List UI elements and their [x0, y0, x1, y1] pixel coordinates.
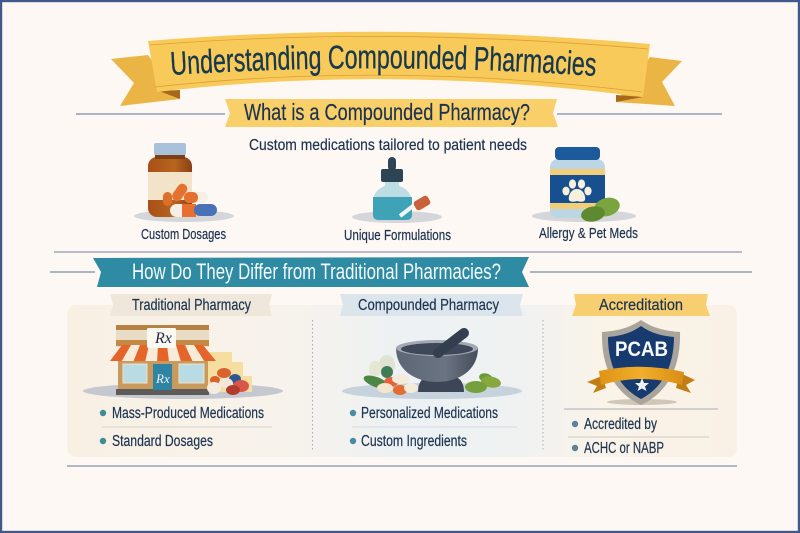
icon: PCAB shield badge — [587, 320, 695, 405]
heading: accreditation — [572, 294, 710, 316]
icon: dropper bottle — [352, 157, 442, 223]
list: accreditation: ACHC or NABP — [584, 440, 664, 457]
text: door Rx: Rx — [155, 371, 170, 386]
heading: traditional pharmacy: Traditional Pharmacy — [132, 297, 251, 314]
title: Understanding Compounded Pharmacies — [171, 44, 596, 76]
list: traditional pharmacy: Standard Dosages — [112, 433, 213, 450]
heading: compounded pharmacy — [340, 294, 523, 316]
text: sign Rx: Rx — [154, 330, 172, 347]
section heading: what is a compounded pharmacy: What is a Compounded Pharmacy? — [244, 99, 530, 125]
list: traditional pharmacy: Mass-Produced Medications — [112, 405, 264, 422]
section heading: how do they differ — [50, 257, 752, 287]
heading: traditional pharmacy — [110, 294, 272, 316]
list: compounded pharmacy: Personalized Medications — [361, 405, 498, 422]
panel: comparison — [67, 305, 737, 457]
heading: accreditation: Accreditation — [599, 297, 683, 314]
icon: pet medication jar — [532, 147, 636, 223]
label: allergy and pet meds: Allergy & Pet Meds — [539, 226, 638, 242]
list: compounded pharmacy — [350, 405, 517, 450]
icon: pharmacy storefront with pills — [83, 325, 283, 399]
icon: paw print — [562, 179, 592, 202]
subtitle: Custom medications tailored to patient needs — [249, 137, 527, 154]
icon: mortar and pestle with pills and herbs — [342, 333, 522, 399]
list: accreditation — [564, 409, 718, 457]
heading: compounded pharmacy: Compounded Pharmacy — [358, 297, 499, 314]
icon: pill bottle with capsules — [134, 143, 234, 222]
section heading: what is a compounded pharmacy — [76, 99, 722, 127]
section heading: how do they differ: How Do They Differ from Traditional Pharmacies? — [132, 259, 501, 284]
list: accreditation: Accredited by — [584, 416, 657, 433]
label: custom dosages: Custom Dosages — [141, 227, 226, 243]
label: unique formulations: Unique Formulations — [344, 228, 451, 244]
list: traditional pharmacy — [100, 405, 272, 450]
text: PCAB: PCAB — [615, 338, 668, 361]
list: compounded pharmacy: Custom Ingredients — [361, 433, 467, 450]
title banner — [111, 32, 682, 106]
